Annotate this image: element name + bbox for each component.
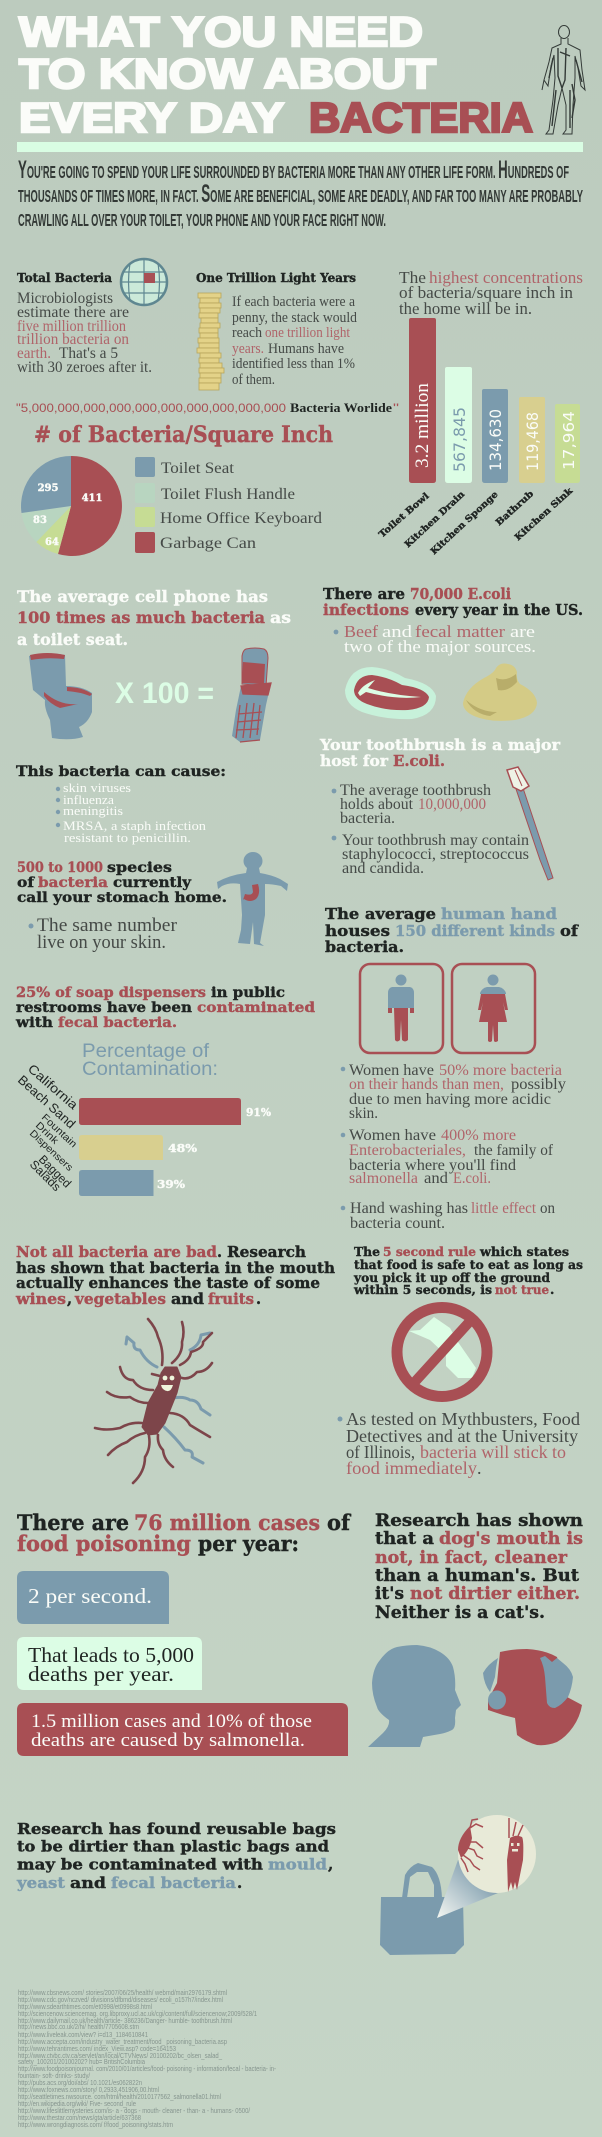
- heading: soap dispensers: 25% of soap dispensers: [16, 985, 206, 1001]
- heading: human hand: The average: [325, 905, 436, 923]
- text block: highest concentrations: the home will be in.: [399, 299, 532, 318]
- bullet list: hands: 400% more: [441, 1127, 516, 1144]
- heading: dog mouth: not, in fact, cleaner: [375, 1548, 568, 1568]
- heading: not all bacteria are bad: [15, 1244, 335, 1308]
- bullet list: sources: and: [382, 622, 413, 641]
- sources list: http://news.bbc.co.uk/2/hi/ health/7705608.stm: [18, 2022, 139, 2031]
- heading: stomach species: call your stomach home.: [17, 890, 227, 906]
- heading: reusable bags: [16, 1820, 336, 1892]
- bullet: mythbusters: of Illinois,: [346, 1442, 415, 1462]
- text block: light years: years.: [232, 341, 264, 357]
- bullet: same number: The same number: [37, 916, 177, 936]
- icon: no hand sign: [397, 1308, 487, 1396]
- text block: light years: [232, 294, 357, 388]
- bar labels: [377, 486, 576, 557]
- heading: dog mouth: not dirtier either.: [410, 1584, 580, 1604]
- heading: food poisoning: 76 million cases: [134, 1510, 320, 1535]
- chart title: Percentage of: [82, 1041, 210, 1062]
- icon: penny stack: [197, 293, 224, 390]
- panel: bacteria per square inch pie: [21, 422, 333, 556]
- heading: soap dispensers: [15, 985, 315, 1031]
- pie chart: 411: [82, 493, 102, 504]
- callout: deaths: That leads to 5,000: [28, 1643, 194, 1667]
- heading: dog mouth: that a: [375, 1529, 434, 1549]
- bullet: mythbusters: .: [477, 1458, 482, 1478]
- panel: food poisoning: [17, 1510, 352, 1756]
- heading: cell phone: a toilet seat.: [17, 630, 128, 649]
- title: WHAT YOU NEED: [19, 8, 423, 55]
- heading: dog mouth: than a human's. But: [375, 1566, 579, 1586]
- title: BACTERIA: [309, 94, 533, 141]
- icon: globe: [121, 259, 167, 305]
- title: TO KNOW ABOUT: [19, 50, 436, 97]
- text block: total bacteria: five million trillion: [17, 318, 126, 335]
- bullet list: toothbrush: [332, 782, 529, 877]
- heading: food poisoning: There are: [17, 1510, 129, 1535]
- bullet list: toothbrush: Your toothbrush may contain: [342, 832, 529, 849]
- text block: highest concentrations: [399, 268, 583, 318]
- bullet list: toothbrush: The average toothbrush: [340, 782, 491, 799]
- heading: human hand: houses: [325, 922, 390, 940]
- bullet list: toothbrush: holds about: [340, 796, 414, 813]
- icon: steak: [345, 667, 436, 719]
- bullet list: hands: salmonella: [349, 1170, 418, 1187]
- heading: human hand: bacteria.: [325, 938, 404, 956]
- sources list: [18, 1988, 276, 2129]
- bar labels: Bagged: [36, 1152, 74, 1190]
- bullet: same number: [28, 916, 177, 953]
- icon: human anatomy figure: [542, 26, 585, 134]
- heading: five second rule: 5 second rule: [383, 1244, 476, 1259]
- bar: beach sand: [79, 1098, 272, 1125]
- bar labels: Salads: [27, 1157, 64, 1194]
- heading: e.coli infections: infections: [323, 601, 409, 619]
- heading: not all bacteria are bad: Research: [227, 1244, 306, 1261]
- bar: bathtub: [519, 397, 545, 483]
- text block: total bacteria: Microbiologists: [17, 290, 113, 307]
- heading: five second rule: [353, 1244, 583, 1297]
- text block: total bacteria: That's a 5: [59, 345, 118, 362]
- bar: bagged salads: 39%: [157, 1178, 186, 1191]
- pie chart: 64: [45, 537, 59, 548]
- heading: stomach species: 500 to 1000: [17, 860, 103, 876]
- bullet: mythbusters: Detectives and at the University: [346, 1426, 578, 1446]
- bar labels: Beach Sand: [15, 1072, 79, 1131]
- bar: toilet bowl: 3.2 million: [412, 383, 433, 468]
- heading: dog mouth: Research has shown: [375, 1511, 583, 1531]
- sources list: http://www.lifeslittlemysteries.com/is- a - dogs - mouth- cleaner - than- a - humans- 0500/: [18, 2106, 250, 2115]
- heading: dog mouth: dog's mouth is: [439, 1529, 583, 1549]
- heading: soap dispensers: in public: [211, 985, 285, 1001]
- bullet list: sources: Beef: [344, 622, 379, 641]
- bar: kitchen drain: 567,845: [450, 407, 469, 472]
- sources list: safety_100201/20100202? hub= BritishColumbia: [18, 2057, 145, 2066]
- text block: light years: Humans have: [268, 341, 344, 357]
- icon: woman: [452, 964, 535, 1053]
- text block: highest concentrations: The: [399, 268, 426, 287]
- sources list: http://www.liveleak.com/view? i=d13_1184610841: [18, 2030, 148, 2039]
- bullet list: sources: two of the major sources.: [344, 637, 536, 656]
- title: EVERY DAY: [19, 94, 284, 141]
- text block: total bacteria: trillion bacteria on: [17, 331, 129, 348]
- bullet list: hands: possibly: [511, 1076, 566, 1093]
- heading: reusable bags: to be dirtier than plastic bags and: [17, 1838, 330, 1856]
- heading: not all bacteria are bad: .: [256, 1291, 261, 1308]
- heading: human hand: [325, 905, 580, 956]
- icon: smiling bacterium: [95, 1319, 212, 1483]
- sources list: http://www.dailymail.co.uk/health/article- 386236/Danger- humble- toothbrush.html: [18, 2016, 232, 2025]
- heading: cell phone: The average cell phone has: [17, 587, 268, 606]
- heading: stomach species: bacteria: [38, 875, 108, 891]
- callout: deaths: [17, 1637, 202, 1690]
- bar: kitchen drain: [445, 367, 472, 483]
- icon: fecal matter: [463, 664, 537, 721]
- heading: soap dispensers: contaminated: [197, 1000, 315, 1016]
- sources list: http://www.accepta.com/industry_water_treatment/food_ poisoning_bacteria.asp: [18, 2037, 227, 2046]
- bullet list: hands: E.coli.: [453, 1170, 491, 1187]
- text block: light years: penny, the stack would: [232, 310, 357, 326]
- heading: five second rule: that food is safe to eat as long as: [354, 1257, 583, 1272]
- worldwide number line: Bacteria Worlide: [290, 400, 392, 415]
- text block: light years: of them.: [232, 372, 275, 388]
- text block: light years: If each bacteria were a: [232, 294, 355, 310]
- panel: one trillion light years: [196, 271, 357, 390]
- bullet list: hands: 50% more bacteria: [439, 1062, 562, 1079]
- heading: toothbrush: E.coli.: [393, 753, 445, 770]
- heading: one trillion light years: One Trillion Light Years: [196, 271, 356, 285]
- heading: stomach species: species: [107, 860, 172, 876]
- heading: cell phone: 100 times as much bacteria: [17, 608, 265, 627]
- bullet list: illnesses: meningitis: [63, 803, 123, 818]
- icon: dog head: [483, 1649, 582, 1745]
- text block: total bacteria: [17, 290, 152, 376]
- heading: soap dispensers: with: [15, 1015, 53, 1031]
- heading: bacteria per square inch: # of Bacteria/Square Inch: [34, 422, 333, 448]
- panel: not all bacteria are bad: [15, 1244, 335, 1483]
- bullet list: hands: bacteria count.: [350, 1215, 445, 1232]
- heading: not all bacteria are bad: vegetables: [74, 1291, 166, 1308]
- bar labels: Fountain: [39, 1112, 79, 1150]
- bullet list: illnesses: [56, 780, 207, 845]
- heading: not all bacteria are bad: .: [217, 1244, 222, 1261]
- bullet list: hands: Enterobacteriales,: [349, 1142, 466, 1159]
- pie chart: [21, 456, 122, 556]
- pie chart: 83: [33, 515, 47, 526]
- heading: not all bacteria are bad: wines: [15, 1291, 66, 1308]
- heading: reusable bags: fecal bacteria: [111, 1874, 236, 1892]
- bar: fountain drinks: [79, 1135, 198, 1160]
- sources list: http://en.wikipedia.org/wiki/ Five- second_rule: [18, 2099, 136, 2108]
- sources list: http://www.foodpoisonjournal. com/2010/01/articles/food- poisoning - information/fecal - bacteria- in-: [18, 2064, 276, 2073]
- panel: soap dispensers: [15, 985, 315, 1196]
- sources list: http://www.wrongdiagnosis.com/ f/food_poisoning/stats.htm: [18, 2120, 173, 2129]
- heading: toothbrush: Your toothbrush is a major: [319, 737, 560, 754]
- sources list: http://www.cbsnews.com/ stories/2007/06/25/health/ webmd/main2976179.shtml: [18, 1988, 227, 1997]
- text block: total bacteria: estimate there are: [17, 304, 129, 321]
- heading: stomach species: currently: [113, 875, 192, 891]
- bullet list: hands: bacteria where you'll find: [349, 1157, 516, 1174]
- heading: five second rule: The: [354, 1244, 380, 1259]
- bullet list: hands: skin.: [349, 1105, 378, 1122]
- bar labels: Dispensers: [27, 1128, 75, 1174]
- heading: reusable bags: ,: [328, 1856, 333, 1874]
- bullet: mythbusters: As tested on Mythbusters, Food: [346, 1409, 580, 1429]
- text block: total bacteria: earth.: [17, 345, 51, 362]
- heading: food poisoning: [17, 1510, 352, 1556]
- panel: human hand: [325, 905, 580, 1232]
- bar: beach sand: 91%: [246, 1106, 272, 1119]
- text block: highest concentrations: highest concentrations: [429, 268, 583, 287]
- multiplier text: X 100 =: [115, 677, 214, 710]
- heading: reusable bags: .: [237, 1874, 242, 1892]
- bullet list: sources: [334, 622, 536, 656]
- text block: highest concentrations: of bacteria/square inch in: [399, 283, 573, 302]
- bar labels: Toilet Bowl: [377, 491, 432, 540]
- bullet list: illnesses: resistant to penicillin.: [64, 830, 191, 845]
- legend: [135, 457, 322, 553]
- heading: e.coli infections: [323, 585, 583, 619]
- bar labels: California: [25, 1061, 82, 1113]
- sources list: http://www.cdc.gov/nczved/ divisions/dfbmd/diseases/ ecoli_o157h7/index.html: [18, 1995, 223, 2004]
- sources list: http://www.ctvbc.ctv.ca/servlet/an/local/CTVNews/ 20100202/bc_olsen_salad_: [18, 2051, 223, 2060]
- bullet list: hands: little effect: [471, 1200, 537, 1217]
- bar labels: Bathrub: [494, 489, 536, 528]
- heading: e.coli infections: every year in the US.: [415, 601, 583, 619]
- heading: e.coli infections: 70,000 E.coli: [410, 585, 511, 603]
- heading: cell phone: as: [270, 608, 291, 627]
- sources list: http://www.foxnews.com/story/ 0,2933,451906,00.html: [18, 2085, 159, 2094]
- panel: cell phone: [17, 587, 291, 742]
- heading: reusable bags: may be contaminated with: [17, 1856, 263, 1874]
- sources list: http://www.sdearthtimes.com/et0998/et0998s8.html: [18, 2002, 152, 2011]
- intro text: [18, 156, 583, 230]
- panel: stomach species: [17, 852, 288, 953]
- icon: man: [360, 964, 443, 1053]
- bar: toilet bowl: [409, 318, 436, 483]
- heading: soap dispensers: restrooms have been: [16, 1000, 192, 1016]
- heading: dog mouth: it's: [375, 1584, 404, 1604]
- bar: kitchen sink: [555, 404, 580, 483]
- bar: bathtub: 119,468: [523, 412, 542, 471]
- panel: reusable bags: [16, 1815, 536, 1955]
- heading: human hand: of: [560, 922, 580, 940]
- title: [19, 8, 533, 141]
- heading: not all bacteria are bad: has shown that bacteria in the mouth: [16, 1260, 335, 1277]
- panel: this bacteria can cause: [16, 764, 226, 845]
- heading: five second rule: not true: [495, 1282, 549, 1297]
- heading: dog mouth: Neither is a cat's.: [375, 1603, 545, 1623]
- sources list: http://pubs.acs.org/doi/abs/ 10.1021/es062822n: [18, 2078, 142, 2087]
- bullet list: toothbrush: staphylococci, streptococcus: [342, 846, 529, 863]
- heading: not all bacteria are bad: ,: [67, 1291, 72, 1308]
- bullet list: toothbrush: bacteria.: [340, 810, 395, 827]
- heading: stomach species: [17, 860, 227, 906]
- bullet list: hands: Women have: [349, 1062, 434, 1079]
- heading: reusable bags: and: [70, 1874, 107, 1892]
- legend: Toilet Seat: [161, 460, 235, 477]
- bar labels: Kitchen Drain: [403, 489, 467, 550]
- bullet list: illnesses: MRSA, a staph infection: [63, 818, 207, 833]
- heading: toothbrush: host for: [320, 753, 388, 770]
- bar labels: Kitchen Sink: [513, 486, 576, 543]
- heading: reusable bags: Research has found reusable bags: [17, 1820, 336, 1838]
- bullet list: hands: Hand washing has: [350, 1200, 468, 1217]
- bullet list: toothbrush: and candida.: [342, 860, 424, 877]
- text block: light years: reach: [232, 325, 262, 341]
- sources list: fountain- soft- drinks- study/: [18, 2071, 90, 2080]
- bullet: same number: live on your skin.: [37, 933, 166, 953]
- heading: human hand: human hand: [441, 905, 558, 923]
- heading: not all bacteria are bad: and: [171, 1291, 204, 1308]
- heading: total bacteria: Total Bacteria: [17, 271, 112, 285]
- bullet list: hands: [341, 1062, 566, 1232]
- legend: Home Office Keyboard: [160, 510, 322, 527]
- heading: dog mouth: [375, 1511, 583, 1623]
- text block: light years: one trillion light: [265, 325, 351, 341]
- panel: total bacteria: [17, 259, 167, 376]
- bullet: mythbusters: bacteria will stick to: [420, 1442, 566, 1462]
- icon: tote bag with magnified bacteria: [380, 1815, 536, 1955]
- sources list: http://sciencenow.sciencemag. org.libproxy.ucl.ac.uk/cgi/content/full/sciencenow;2009/528/1: [18, 2009, 257, 2018]
- callout: per second: 2 per second.: [28, 1584, 152, 1608]
- icon: toothbrush: [507, 767, 553, 880]
- legend: Garbage Can: [160, 535, 256, 552]
- icon: human head: [368, 1645, 461, 1747]
- heading: cell phone: [17, 587, 291, 649]
- bullet: mythbusters: food immediately: [346, 1458, 477, 1478]
- chart title: [82, 1041, 218, 1080]
- worldwide number line: "5,000,000,000,000,000,000,000,000,000,000: [16, 401, 286, 415]
- bullet list: illnesses: influenza: [63, 792, 114, 807]
- sources list: http://www.tehrantimes.com/ index_View.asp? code=164153: [18, 2044, 176, 2053]
- heading: toothbrush: [319, 737, 560, 770]
- sources list: http://seattletimes.nwsource. com/html/health/2010177562_salmonella01.html: [18, 2092, 221, 2101]
- panel: dog mouth: [368, 1511, 583, 1747]
- bar labels: Drink: [33, 1120, 61, 1147]
- bullet list: sources: fecal matter: [415, 622, 506, 641]
- bullet list: hands: the family of: [474, 1142, 554, 1159]
- bar: kitchen sponge: [482, 389, 508, 483]
- bar: kitchen sink: 17,964: [560, 411, 578, 470]
- worldwide number line: ": [393, 401, 399, 415]
- callout: salmonella: deaths are caused by salmonella.: [31, 1730, 305, 1751]
- icon: body with stomach: [217, 852, 288, 946]
- heading: reusable bags: mould: [268, 1856, 328, 1874]
- callout: deaths: deaths per year.: [28, 1662, 174, 1686]
- heading: food poisoning: of: [327, 1510, 352, 1535]
- text block: light years: identified less than 1%: [232, 356, 355, 372]
- divider bar: [17, 142, 583, 152]
- bar: bagged salads: [79, 1170, 186, 1196]
- bullet list: hands: and: [424, 1170, 448, 1187]
- heading: food poisoning: per year:: [198, 1531, 299, 1556]
- heading: can cause: This bacteria can cause:: [16, 764, 226, 780]
- chart title: Contamination:: [82, 1059, 218, 1080]
- heading: reusable bags: yeast: [16, 1874, 65, 1892]
- bullet list: hands: on their hands than men,: [349, 1076, 504, 1093]
- bar labels: Kitchen Sponge: [429, 490, 501, 557]
- bullet list: illnesses: skin viruses: [63, 780, 131, 795]
- panel: five second rule: [338, 1244, 583, 1478]
- heading: not all bacteria are bad: Not all bacteria are bad: [16, 1244, 217, 1261]
- callout: per second: [17, 1571, 169, 1624]
- worldwide number line: [16, 400, 399, 415]
- pie chart: 295: [38, 483, 58, 494]
- bullet list: hands: due to men having more acidic: [349, 1091, 551, 1108]
- legend: Toilet Flush Handle: [161, 486, 295, 503]
- heading: not all bacteria are bad: fruits: [208, 1291, 254, 1308]
- bullet list: sources: are: [510, 622, 535, 641]
- heading: food poisoning: food poisoning: [17, 1531, 191, 1556]
- heading: five second rule: .: [550, 1282, 554, 1297]
- callout: salmonella: [17, 1703, 348, 1756]
- panel: e.coli infections: [323, 585, 583, 721]
- callout: salmonella: 1.5 million cases and 10% of those: [31, 1711, 312, 1732]
- heading: human hand: 150 different kinds: [395, 922, 555, 940]
- panel: highest concentrations bar chart: [377, 268, 583, 557]
- sources list: http://www.thestar.com/news/gta/article/637368: [18, 2113, 141, 2122]
- bullet list: hands: Women have: [349, 1127, 436, 1144]
- heading: five second rule: which states: [479, 1244, 569, 1259]
- bar: fountain drinks: 48%: [168, 1142, 198, 1155]
- heading: five second rule: within 5 seconds, is: [353, 1282, 492, 1297]
- heading: soap dispensers: fecal bacteria.: [58, 1015, 177, 1031]
- heading: e.coli infections: There are: [323, 585, 405, 603]
- text block: total bacteria: with 30 zeroes after it.: [17, 359, 152, 376]
- heading: not all bacteria are bad: actually enhances the taste of some: [16, 1275, 320, 1292]
- heading: stomach species: of: [17, 875, 35, 891]
- icon: toilet: [29, 653, 92, 739]
- bar: kitchen sponge: 134,630: [486, 409, 505, 471]
- bullet list: hands: on: [540, 1200, 555, 1217]
- heading: five second rule: you pick it up off the ground: [353, 1270, 550, 1285]
- icon: flip phone: [232, 648, 271, 742]
- panel: toothbrush: [319, 737, 560, 880]
- bar labels: [15, 1061, 82, 1194]
- bullet list: toothbrush: 10,000,000: [418, 796, 486, 813]
- bullet: mythbusters: [338, 1409, 580, 1478]
